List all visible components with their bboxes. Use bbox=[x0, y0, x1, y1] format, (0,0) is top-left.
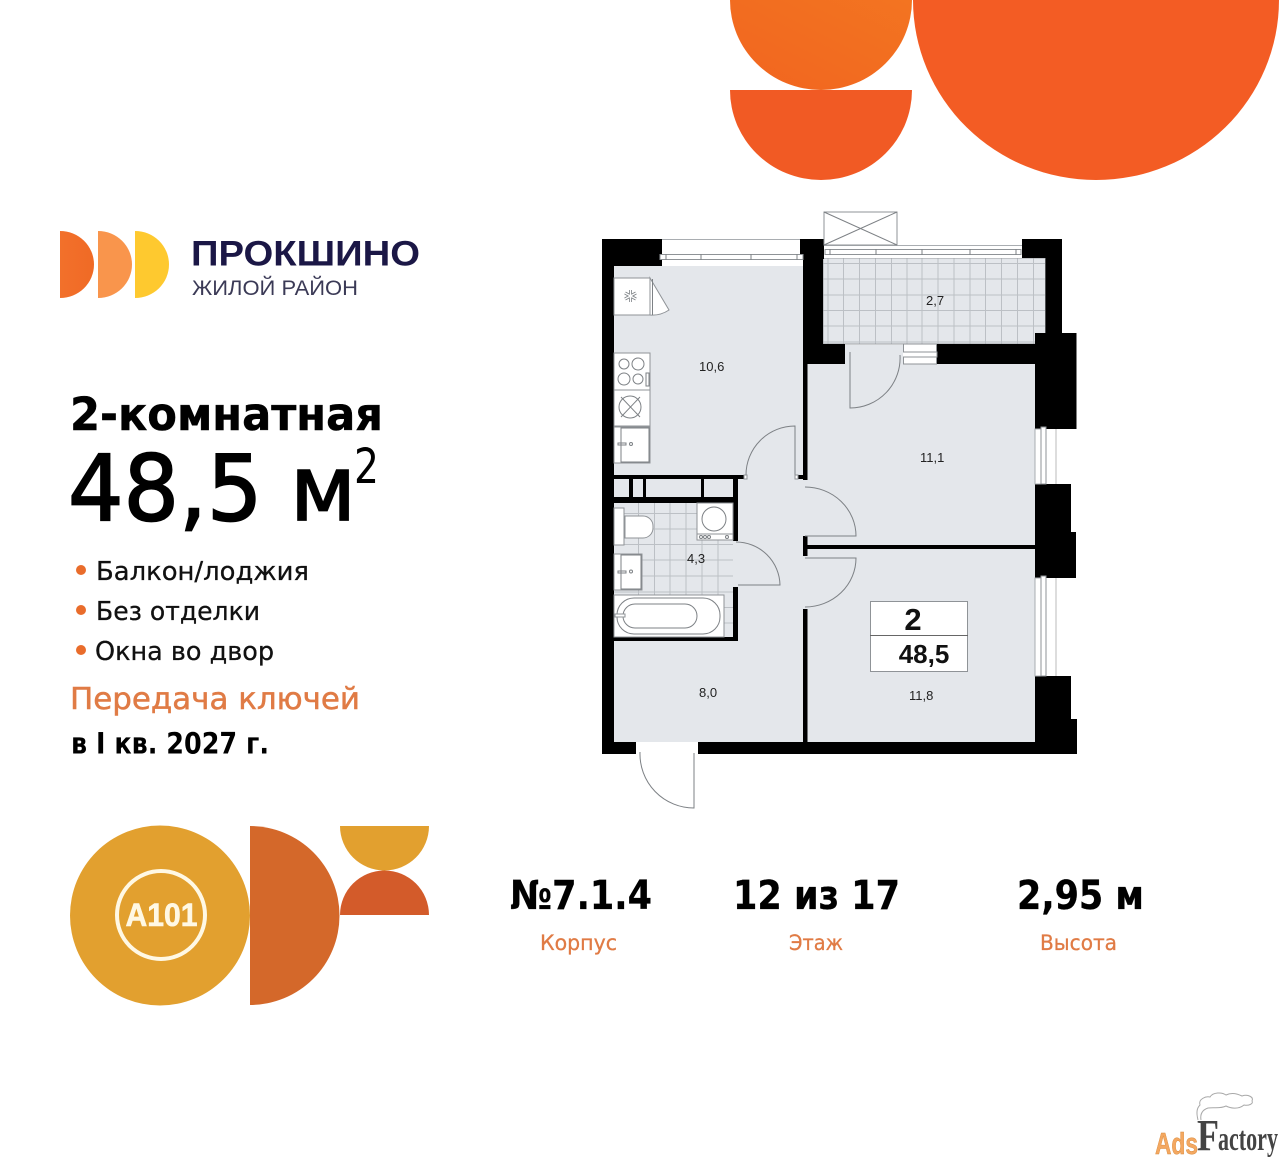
room area labels: 8,0 bbox=[699, 685, 717, 700]
right windows bbox=[1035, 427, 1056, 676]
floor info bbox=[733, 873, 900, 955]
balcony tiled floor bbox=[823, 258, 1046, 344]
apartment badge: 48,5 bbox=[899, 639, 949, 669]
floor info: 12 из 17 bbox=[733, 873, 900, 919]
apartment badge bbox=[870, 602, 968, 672]
room area labels: 11,8 bbox=[909, 688, 933, 703]
room area labels: 2,7 bbox=[926, 293, 944, 308]
heading: apartment area: 48,5 м bbox=[68, 437, 356, 542]
ceiling height info bbox=[1017, 873, 1144, 955]
feature list: Без отделки bbox=[96, 597, 260, 627]
building info: Корпус bbox=[540, 931, 617, 955]
building info: №7.1.4 bbox=[510, 873, 652, 919]
feature list: Окна во двор bbox=[95, 637, 274, 667]
building info bbox=[510, 873, 652, 955]
floor plan bbox=[602, 212, 1077, 808]
decoration: A101 half circles bbox=[250, 826, 429, 1005]
heading: apartment area: 2 bbox=[354, 439, 379, 495]
ceiling height info: Высота bbox=[1040, 931, 1117, 955]
watermark: AdsFactory: Ads bbox=[1155, 1126, 1198, 1160]
watermark: AdsFactory bbox=[1155, 1093, 1278, 1160]
key handover label: Передача ключей bbox=[70, 682, 360, 717]
logo: Прокшино жилой район bbox=[60, 231, 420, 300]
room floors bbox=[614, 266, 1035, 742]
walls bbox=[602, 239, 1077, 754]
bathroom tiled floor bbox=[614, 503, 734, 637]
doors bbox=[636, 345, 903, 808]
logo: Прокшино жилой район: ЖИЛОЙ РАЙОН bbox=[192, 276, 358, 300]
A101 logo circle bbox=[70, 826, 250, 1006]
key handover date: в I кв. 2027 г. bbox=[71, 726, 269, 760]
feature list: Балкон/лоджия bbox=[96, 557, 309, 587]
kitchen fixtures bbox=[614, 278, 669, 463]
room area labels: 10,6 bbox=[699, 359, 724, 374]
floor info: Этаж bbox=[789, 931, 843, 955]
room area labels bbox=[687, 293, 944, 703]
balcony door window bbox=[901, 344, 937, 364]
apartment badge: 2 bbox=[904, 602, 922, 637]
top decoration: orange half circles bbox=[730, 0, 1279, 180]
ceiling height info: 2,95 м bbox=[1017, 873, 1144, 919]
room area labels: 4,3 bbox=[687, 551, 705, 566]
feature list bbox=[76, 557, 309, 667]
A101 logo circle: A101 bbox=[126, 897, 198, 933]
top window kitchen bbox=[660, 239, 803, 266]
balcony storage box bbox=[824, 212, 897, 245]
heading: apartment type: 2-комнатная bbox=[70, 388, 383, 441]
logo: Прокшино жилой район: ПРОКШИНО bbox=[191, 234, 420, 274]
watermark: AdsFactory: F bbox=[1197, 1111, 1219, 1160]
room area labels: 11,1 bbox=[920, 450, 944, 465]
balcony glazing bbox=[824, 245, 1022, 258]
bathroom fixtures bbox=[614, 503, 733, 637]
